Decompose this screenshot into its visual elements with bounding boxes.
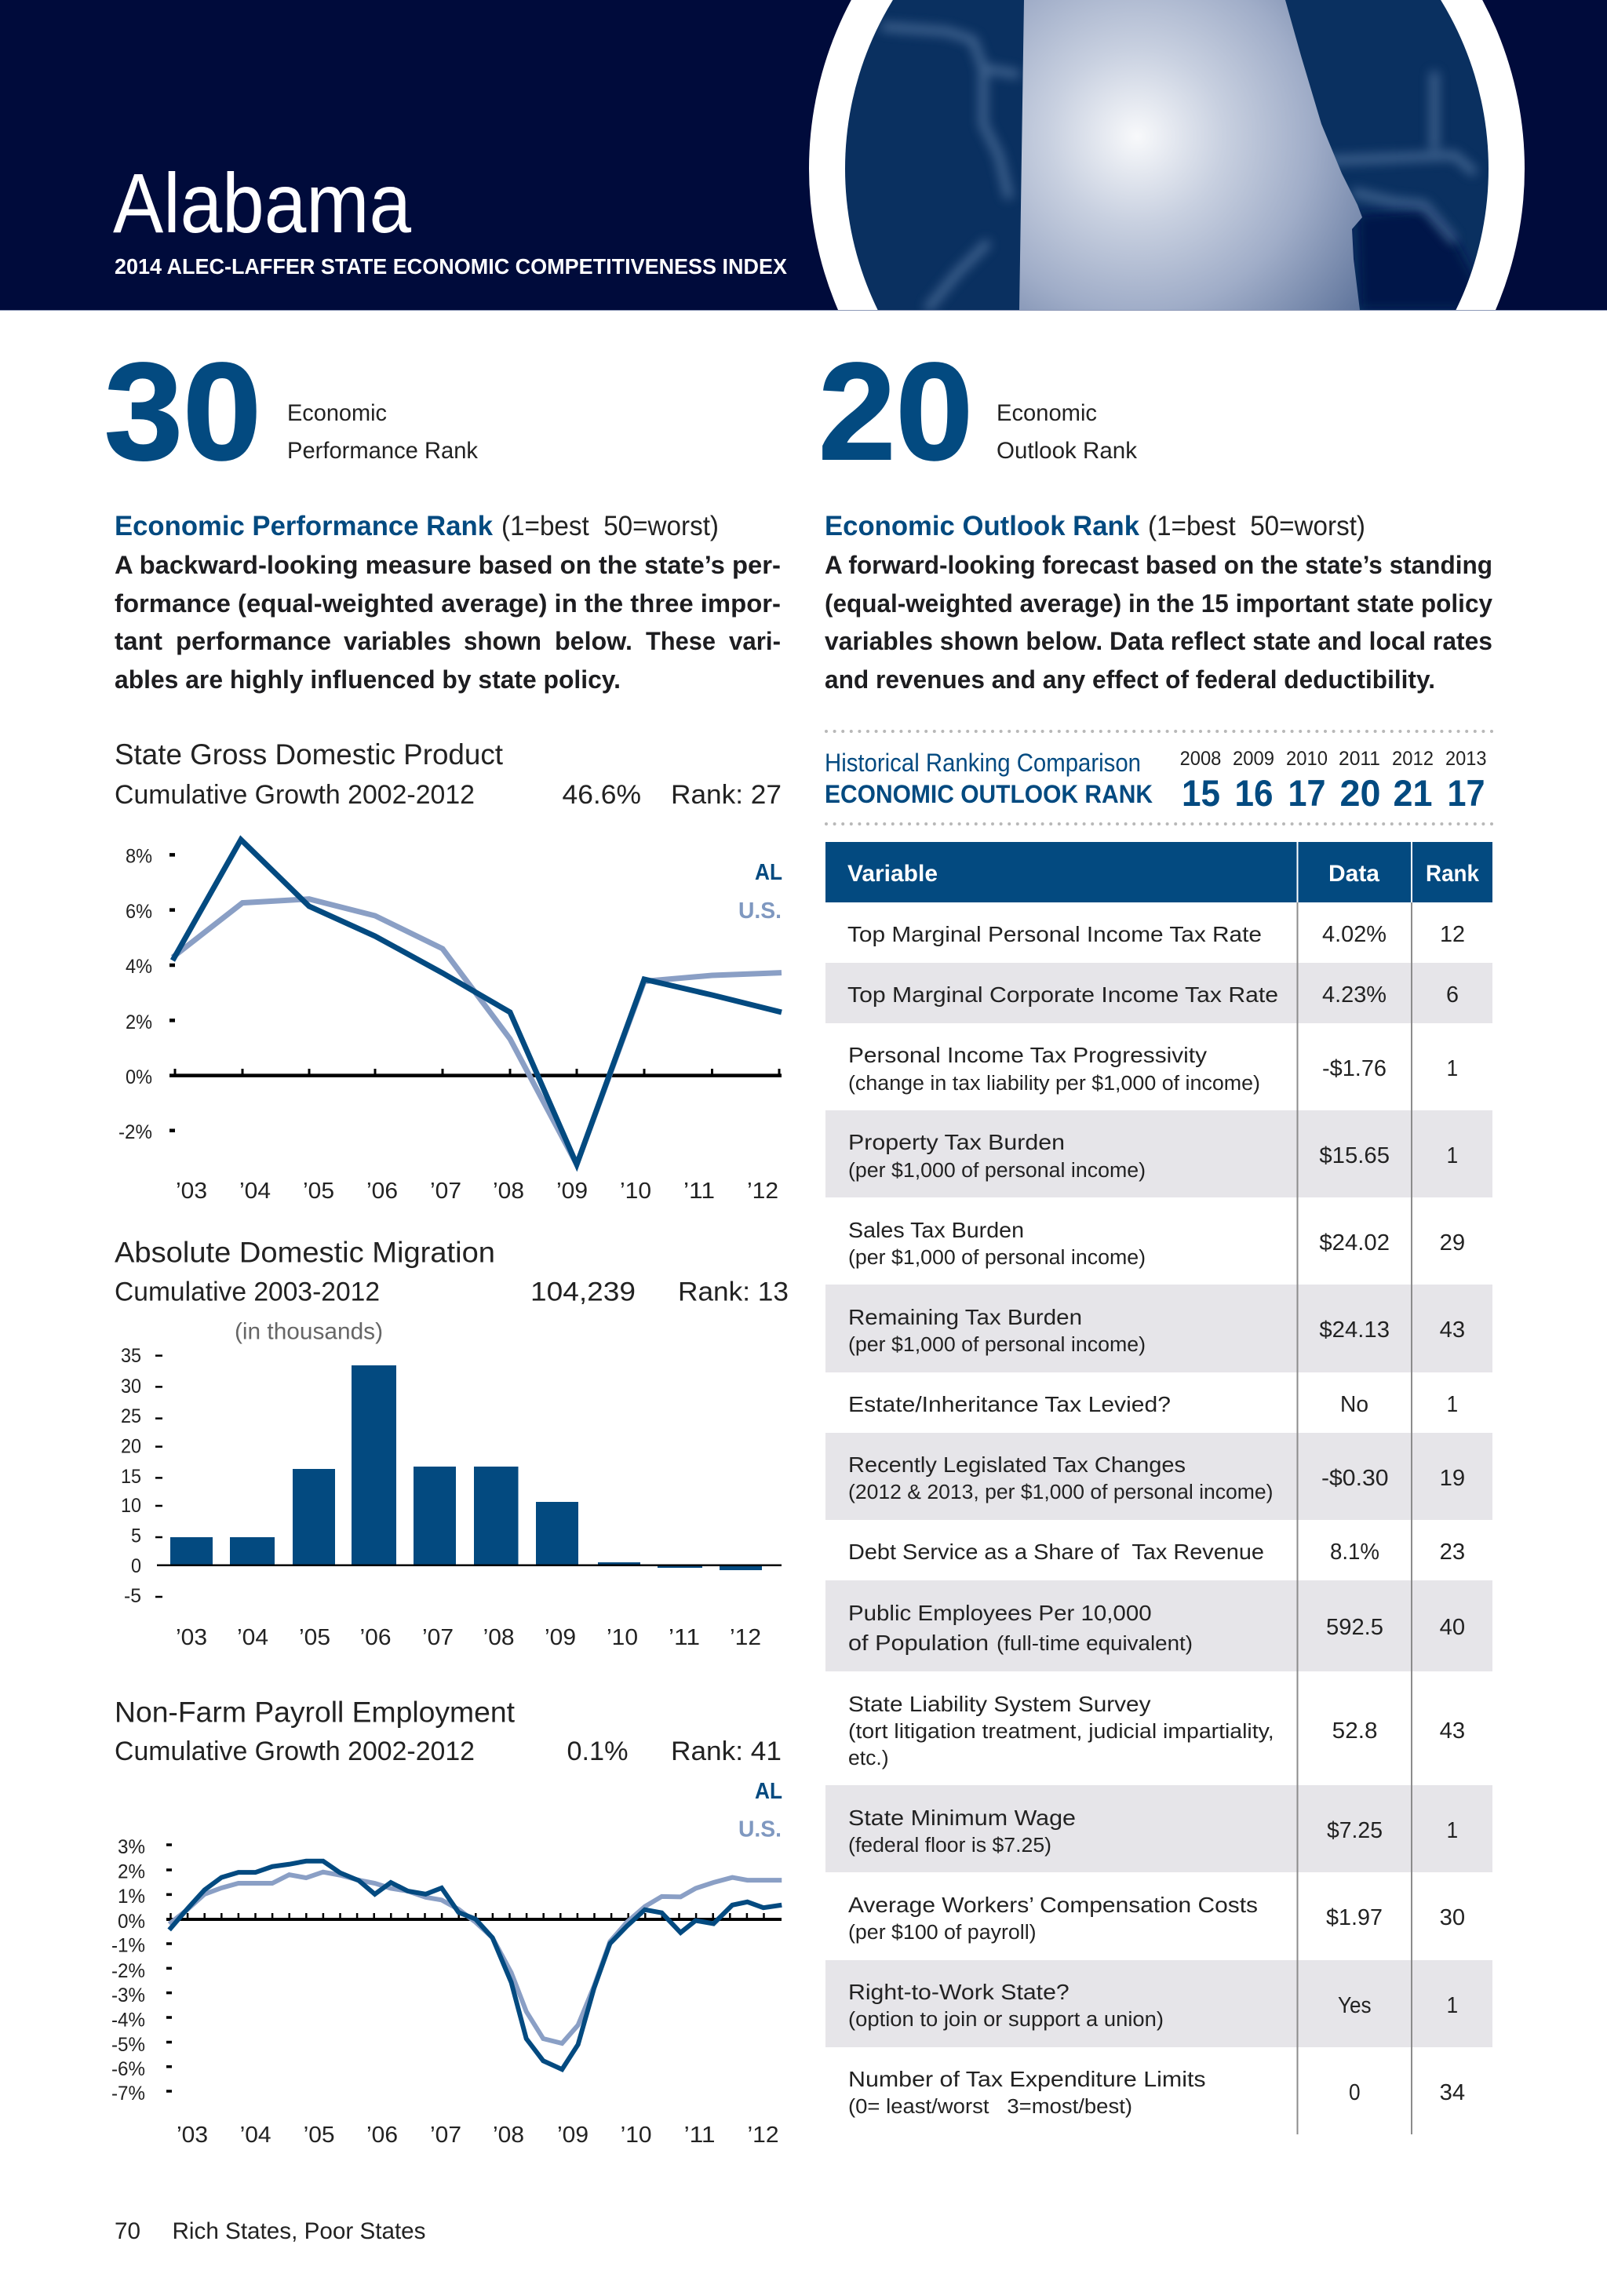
row: state liability system survey: etc.)	[848, 1748, 889, 1769]
performance description: ables are highly influenced by state policy.	[115, 665, 621, 694]
row: state minimum wage: (federal floor is $7.25)	[848, 1835, 1051, 1857]
big rank number 20: 20	[818, 335, 973, 489]
performance heading	[115, 511, 719, 541]
row: top marginal personal income tax rate	[847, 922, 1465, 947]
y axis labels: 0%	[126, 1066, 152, 1088]
row: sales tax burden	[848, 1218, 1465, 1269]
x axis labels: ’11	[669, 1625, 700, 1650]
performance heading: Economic Performance Rank	[115, 511, 494, 541]
rank label: Economic	[997, 400, 1097, 426]
years: 2009	[1233, 748, 1274, 770]
chart heading	[115, 1237, 789, 1345]
y axis ticks	[155, 1356, 162, 1597]
rank label: Economic	[287, 400, 387, 426]
y axis labels: -3%	[111, 1984, 145, 2006]
outlook heading: (1=best 50=worst)	[1148, 511, 1365, 541]
chart heading: Cumulative Growth 2002-2012	[115, 780, 475, 810]
row: public employees: Public Employees Per 10,000	[848, 1601, 1152, 1625]
y axis labels: 15	[121, 1466, 141, 1488]
x axis labels: ’09	[557, 2123, 589, 2148]
row: property tax burden: (per $1,000 of personal income)	[848, 1160, 1146, 1182]
row: number of tax expenditure limits: Number of Tax Expenditure Limits	[848, 2067, 1206, 2091]
historical ranks: 21	[1394, 772, 1433, 814]
row: remaining tax burden: (per $1,000 of personal income)	[848, 1334, 1146, 1356]
row: right-to-work state: (option to join or support a union)	[848, 2009, 1164, 2031]
row: top marginal personal income tax rate: 12	[1440, 922, 1465, 947]
row: number of tax expenditure limits	[848, 2067, 1465, 2118]
x axis labels: ’04	[237, 1625, 268, 1650]
performance heading: (1=best 50=worst)	[501, 511, 719, 541]
row: state minimum wage: State Minimum Wage	[848, 1806, 1076, 1830]
y axis labels: 4%	[126, 956, 152, 978]
x axis labels: ’09	[545, 1625, 576, 1650]
y axis labels: -2%	[118, 1121, 152, 1143]
outlook description: A forward-looking forecast based on the state’s standing	[825, 551, 1492, 579]
y axis labels	[121, 1345, 141, 1607]
rank label: Outlook Rank	[997, 438, 1138, 464]
x axis labels: ’04	[240, 2123, 271, 2148]
x axis labels: ’05	[303, 1179, 334, 1204]
x axis labels: ’12	[747, 1179, 778, 1204]
row: public employees	[848, 1601, 1465, 1655]
chart heading: Cumulative 2003-2012	[115, 1277, 380, 1307]
bars	[170, 1365, 762, 1570]
row: right-to-work state: Right-to-Work State?	[848, 1980, 1070, 2004]
x axis labels: ’12	[730, 1625, 761, 1650]
chart heading: Cumulative Growth 2002-2012	[115, 1737, 475, 1766]
row: sales tax burden: 29	[1440, 1230, 1465, 1256]
panel: historical ranking comparison	[825, 731, 1492, 824]
x axis labels	[176, 1179, 778, 1204]
x axis labels: ’06	[366, 2123, 398, 2148]
performance description: vari-	[729, 627, 781, 655]
y axis labels: 0	[131, 1555, 141, 1577]
outlook description: and revenues and any effect of federal deductibility.	[825, 665, 1435, 694]
row: remaining tax burden: Remaining Tax Burden	[848, 1305, 1082, 1329]
rank label	[287, 400, 479, 464]
outlook description	[825, 551, 1492, 694]
row: number of tax expenditure limits: (0= least/worst 3=most/best)	[848, 2096, 1132, 2118]
chart heading	[115, 1696, 782, 1766]
row: recently legislated tax changes: (2012 & 2013, per $1,000 of personal income)	[848, 1481, 1273, 1503]
performance description: shown	[464, 627, 541, 655]
chart heading: Non-Farm Payroll Employment	[115, 1696, 516, 1728]
line: AL	[173, 840, 782, 1164]
row: property tax burden	[848, 1130, 1458, 1182]
y axis ticks and x axis	[166, 1845, 782, 2091]
y axis labels: 3%	[118, 1836, 145, 1858]
row: top marginal personal income tax rate: 4.02%	[1322, 922, 1387, 947]
chart heading: 104,239	[530, 1277, 636, 1307]
row: top marginal corporate income tax rate: 4.23%	[1322, 982, 1387, 1008]
y axis labels: 2%	[118, 1861, 145, 1883]
line: AL	[169, 1861, 782, 2069]
y axis labels: -6%	[111, 2058, 145, 2080]
x axis labels: ’11	[684, 2123, 716, 2148]
row: estate/inheritance tax levied: No	[1340, 1392, 1368, 1417]
row: estate/inheritance tax levied: Estate/Inheritance Tax Levied?	[848, 1392, 1171, 1416]
panel: economic performance rank	[104, 335, 781, 694]
historical ranks: 15	[1182, 772, 1220, 814]
x axis labels: ’05	[304, 2123, 335, 2148]
footer: 70	[115, 2218, 140, 2244]
panel: economic outlook rank	[818, 335, 1492, 694]
x axis labels: ’08	[483, 1625, 515, 1650]
row: top marginal personal income tax rate: Top Marginal Personal Income Tax Rate	[847, 922, 1262, 946]
y axis labels: 30	[121, 1376, 141, 1398]
row: sales tax burden: $24.02	[1319, 1230, 1390, 1256]
row: remaining tax burden: $24.13	[1319, 1317, 1390, 1343]
x axis labels: ’03	[177, 2123, 208, 2148]
outlook description: (equal-weighted average) in the 15 important state policy	[825, 589, 1492, 618]
chart heading: 0.1%	[567, 1737, 628, 1766]
chart: non-farm payroll employment	[111, 1696, 782, 2148]
y axis labels: -5	[124, 1585, 141, 1607]
row: debt service: 23	[1440, 1540, 1465, 1565]
years	[1180, 748, 1486, 770]
row: sales tax burden: (per $1,000 of personal income)	[848, 1247, 1146, 1269]
row: state liability system survey: State Liability System Survey	[848, 1692, 1151, 1716]
row: remaining tax burden: 43	[1440, 1317, 1465, 1343]
historical ranks: 17	[1447, 772, 1485, 814]
x axis labels: ’07	[422, 1625, 454, 1650]
row: personal income tax progressivity: 1	[1447, 1056, 1458, 1081]
y axis labels: -7%	[111, 2083, 145, 2105]
row: average workers compensation costs: (per $100 of payroll)	[848, 1922, 1037, 1944]
historical ranks	[1182, 772, 1485, 814]
x axis labels: ’09	[556, 1179, 588, 1204]
icon: Alabama state map in circle	[809, 0, 1525, 310]
performance description: formance (equal-weighted average) in the three impor-	[115, 589, 781, 618]
y axis labels: 5	[131, 1525, 141, 1547]
y axis labels: -4%	[111, 2010, 145, 2032]
x axis labels: ’12	[747, 2123, 778, 2148]
row: property tax burden: Property Tax Burden	[848, 1130, 1065, 1154]
legend: AL	[755, 860, 782, 885]
x axis labels: ’04	[239, 1179, 271, 1204]
x axis labels: ’06	[366, 1179, 398, 1204]
row: property tax burden: $15.65	[1319, 1143, 1390, 1168]
rank label	[997, 400, 1138, 464]
y axis labels: 2%	[126, 1011, 152, 1033]
y axis labels: 0%	[118, 1911, 145, 1933]
chart heading: Rank: 27	[671, 780, 782, 810]
row: state minimum wage	[848, 1806, 1458, 1857]
y axis labels: 20	[121, 1436, 141, 1458]
chart heading: State Gross Domestic Product	[115, 738, 504, 771]
years: 2010	[1286, 748, 1328, 770]
chart heading: Rank: 41	[671, 1737, 782, 1766]
title: Alabama	[113, 155, 412, 250]
chart: state gross domestic product	[115, 738, 782, 1204]
row: top marginal corporate income tax rate: Top Marginal Corporate Income Tax Rate	[847, 982, 1278, 1007]
row: recently legislated tax changes: 19	[1440, 1466, 1465, 1491]
y axis labels: -5%	[111, 2034, 145, 2056]
big rank number 30: 30	[104, 335, 261, 489]
outlook heading	[825, 511, 1365, 541]
y axis labels: -1%	[111, 1935, 145, 1957]
chart: absolute domestic migration	[115, 1237, 789, 1650]
table header: Data	[1328, 861, 1380, 887]
table header	[825, 842, 1492, 902]
header banner	[0, 0, 1607, 311]
performance description: These	[646, 627, 716, 655]
row: state liability system survey: (tort litigation treatment, judicial impartiality,	[848, 1721, 1274, 1743]
row: debt service	[848, 1540, 1465, 1565]
row: top marginal corporate income tax rate	[847, 982, 1459, 1008]
x axis labels: ’05	[299, 1625, 330, 1650]
y axis ticks and x axis	[169, 855, 782, 1131]
table: policy variables	[825, 842, 1492, 2134]
row: remaining tax burden	[848, 1305, 1465, 1356]
row: right-to-work state	[848, 1980, 1458, 2031]
y axis labels: 6%	[126, 901, 152, 923]
chart heading	[115, 738, 782, 810]
row: public employees: (full-time equivalent)	[997, 1633, 1193, 1655]
row: top marginal corporate income tax rate: 6	[1446, 982, 1459, 1008]
comparison heading: Historical Ranking Comparison	[825, 749, 1141, 777]
subtitle: 2014 ALEC-LAFFER STATE ECONOMIC COMPETITIVENESS INDEX	[115, 254, 787, 279]
row: personal income tax progressivity: -$1.76	[1322, 1056, 1387, 1081]
rank label: Performance Rank	[287, 438, 479, 464]
row: personal income tax progressivity: Personal Income Tax Progressivity	[848, 1043, 1207, 1067]
legend	[738, 1779, 782, 1842]
row: state liability system survey: 52.8	[1332, 1718, 1378, 1744]
row: debt service: 8.1%	[1330, 1540, 1379, 1565]
row: personal income tax progressivity	[848, 1043, 1458, 1095]
years: 2013	[1445, 748, 1486, 770]
chart heading: Rank: 13	[678, 1277, 789, 1307]
x axis labels: ’08	[493, 2123, 524, 2148]
y axis labels: -2%	[111, 1960, 145, 1982]
y axis labels	[111, 1836, 145, 2105]
comparison heading	[825, 749, 1153, 808]
x axis labels: ’06	[359, 1625, 391, 1650]
performance description: variables	[344, 627, 451, 655]
row: state liability system survey: 43	[1440, 1718, 1465, 1744]
x axis labels: ’07	[430, 1179, 461, 1204]
x axis labels: ’07	[430, 2123, 461, 2148]
row: right-to-work state: Yes	[1338, 1993, 1372, 2018]
row: right-to-work state: 1	[1447, 1993, 1458, 2018]
legend: AL	[755, 1779, 782, 1804]
performance description: A backward-looking measure based on the state’s per-	[115, 551, 781, 579]
chart heading: 46.6%	[562, 780, 641, 810]
y axis labels: 10	[121, 1495, 141, 1517]
x axis labels: ’03	[176, 1179, 207, 1204]
row: state liability system survey	[848, 1692, 1465, 1769]
row: public employees: 592.5	[1326, 1615, 1383, 1640]
row: recently legislated tax changes: -$0.30	[1321, 1466, 1389, 1491]
x axis labels: ’10	[607, 1625, 638, 1650]
row: recently legislated tax changes	[848, 1452, 1465, 1503]
historical ranks: 20	[1340, 772, 1381, 814]
x axis labels	[176, 1625, 761, 1650]
row: estate/inheritance tax levied	[848, 1392, 1458, 1417]
x axis	[157, 1565, 782, 1566]
row: state minimum wage: $7.25	[1327, 1818, 1383, 1843]
row: estate/inheritance tax levied: 1	[1447, 1392, 1458, 1417]
row: debt service: Debt Service as a Share of Tax Revenue	[848, 1540, 1264, 1564]
row: recently legislated tax changes: Recently Legislated Tax Changes	[848, 1452, 1186, 1477]
row: average workers compensation costs: Average Workers’ Compensation Costs	[848, 1893, 1258, 1917]
row: number of tax expenditure limits: 34	[1440, 2080, 1465, 2105]
line: U.S.	[173, 899, 782, 1164]
legend: U.S.	[738, 898, 782, 924]
y axis labels: 8%	[126, 846, 152, 868]
x axis labels: ’08	[493, 1179, 524, 1204]
x axis labels: ’10	[621, 2123, 652, 2148]
historical ranks: 16	[1235, 772, 1273, 814]
row: average workers compensation costs: 30	[1440, 1905, 1465, 1930]
performance description: tant	[115, 627, 162, 655]
row: state minimum wage: 1	[1447, 1818, 1458, 1843]
chart heading: Absolute Domestic Migration	[115, 1237, 495, 1269]
y axis labels: 35	[121, 1345, 141, 1367]
row: number of tax expenditure limits: 0	[1349, 2080, 1361, 2105]
chart heading: (in thousands)	[235, 1319, 383, 1345]
alternating row shading	[825, 963, 1492, 2047]
legend	[738, 860, 782, 924]
performance description: below.	[555, 627, 632, 655]
y axis labels: 1%	[118, 1886, 145, 1908]
x axis labels: ’11	[683, 1179, 715, 1204]
row: property tax burden: 1	[1447, 1143, 1458, 1168]
line: U.S.	[169, 1872, 782, 2043]
row: public employees: of Population	[848, 1631, 989, 1655]
y axis labels	[118, 846, 152, 1143]
y axis labels: 25	[121, 1405, 141, 1427]
row: personal income tax progressivity: (change in tax liability per $1,000 of income)	[848, 1073, 1260, 1095]
years: 2011	[1339, 748, 1380, 770]
years: 2012	[1392, 748, 1434, 770]
outlook description: variables shown below. Data reflect state and local rates	[825, 627, 1492, 655]
footer: Rich States, Poor States	[173, 2218, 425, 2244]
x axis labels: ’10	[620, 1179, 651, 1204]
legend: U.S.	[738, 1817, 782, 1842]
row: public employees: 40	[1440, 1615, 1465, 1640]
historical ranks: 17	[1288, 772, 1326, 814]
performance description: performance	[176, 627, 331, 655]
outlook heading: Economic Outlook Rank	[825, 511, 1140, 541]
x axis labels	[177, 2123, 778, 2148]
row: average workers compensation costs: $1.97	[1326, 1905, 1383, 1930]
years: 2008	[1180, 748, 1221, 770]
performance description	[115, 551, 781, 694]
row: average workers compensation costs	[848, 1893, 1465, 1944]
table header: Variable	[847, 861, 938, 887]
x axis labels: ’03	[176, 1625, 207, 1650]
comparison heading: ECONOMIC OUTLOOK RANK	[825, 780, 1153, 808]
table header: Rank	[1426, 861, 1480, 887]
row: sales tax burden: Sales Tax Burden	[848, 1218, 1024, 1242]
